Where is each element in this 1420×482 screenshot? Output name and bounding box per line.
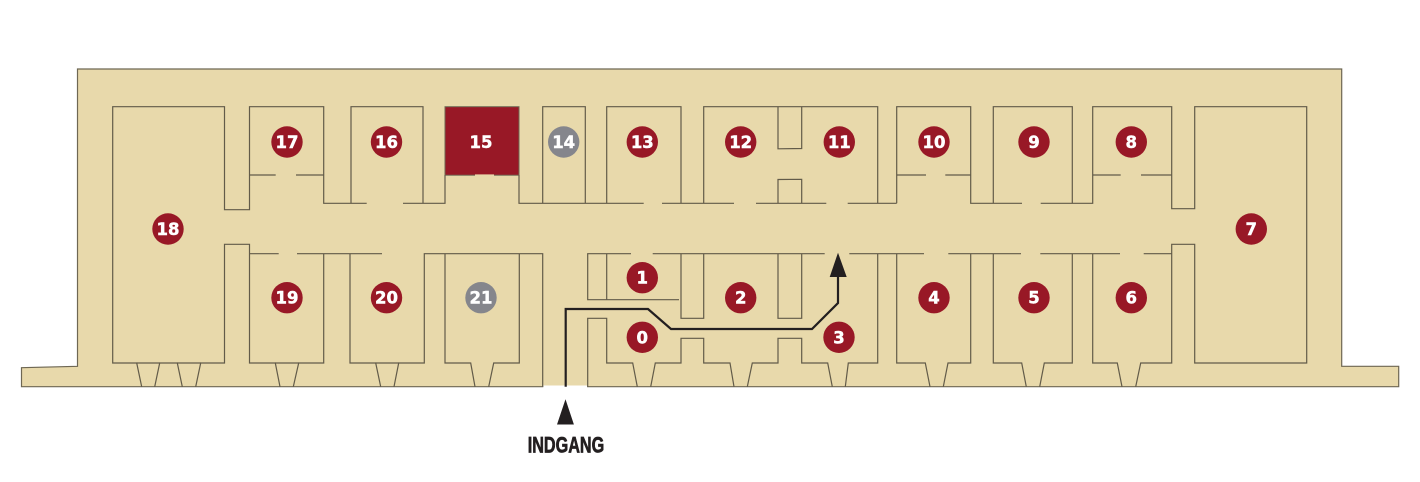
door gap room 15 bbox=[475, 174, 494, 176]
room marker 18: 18 bbox=[157, 220, 179, 239]
walls bbox=[113, 107, 1307, 387]
room marker 6 bbox=[1116, 282, 1147, 313]
room marker 7: 7 bbox=[1246, 220, 1257, 239]
room marker 20: 20 bbox=[375, 289, 398, 308]
room marker 18 bbox=[152, 213, 184, 245]
room marker 10: 10 bbox=[923, 133, 945, 152]
room marker 1: 1 bbox=[637, 269, 648, 288]
room marker 10 bbox=[918, 126, 950, 158]
room marker 13: 13 bbox=[631, 133, 654, 152]
room marker 2: 2 bbox=[735, 289, 746, 308]
entrance gap bbox=[543, 386, 587, 388]
room marker 17 bbox=[271, 126, 303, 158]
room marker 9: 9 bbox=[1028, 133, 1040, 152]
room marker 19 bbox=[271, 282, 303, 313]
room marker 20 bbox=[371, 282, 402, 313]
room marker 16: 16 bbox=[375, 133, 398, 152]
room marker 2 bbox=[725, 282, 756, 313]
room marker 12 bbox=[725, 126, 756, 158]
route arrow bbox=[566, 253, 847, 387]
room marker 19: 19 bbox=[276, 289, 298, 308]
room marker 15: 15 bbox=[470, 133, 492, 152]
room marker 0: 0 bbox=[637, 328, 648, 347]
room marker 1 bbox=[627, 262, 658, 293]
room marker 16 bbox=[371, 126, 402, 158]
room marker 21 bbox=[465, 282, 497, 313]
room marker 4: 4 bbox=[928, 289, 940, 308]
room marker 11 bbox=[824, 126, 855, 158]
room marker 5 bbox=[1018, 282, 1050, 313]
room marker 5: 5 bbox=[1028, 289, 1040, 308]
room marker 3: 3 bbox=[833, 328, 845, 347]
room marker 12: 12 bbox=[729, 133, 752, 152]
entrance arrow bbox=[557, 399, 574, 424]
room marker 11: 11 bbox=[828, 133, 851, 152]
building outline bbox=[22, 69, 1399, 387]
room marker 4 bbox=[918, 282, 950, 313]
room marker 14 bbox=[548, 126, 579, 158]
room marker 9 bbox=[1018, 126, 1050, 158]
room marker 7 bbox=[1236, 213, 1267, 245]
room marker 14: 14 bbox=[552, 133, 575, 152]
room marker 8 bbox=[1116, 126, 1147, 158]
room marker 13 bbox=[627, 126, 658, 158]
room marker 8: 8 bbox=[1126, 133, 1137, 152]
room marker 17: 17 bbox=[276, 133, 298, 152]
highlighted room 15 bbox=[445, 107, 519, 175]
room marker 3 bbox=[823, 322, 855, 353]
room marker 0 bbox=[627, 322, 658, 353]
room marker 21: 21 bbox=[470, 289, 492, 308]
room marker 6: 6 bbox=[1126, 289, 1137, 308]
entrance label: INDGANG bbox=[528, 433, 604, 458]
